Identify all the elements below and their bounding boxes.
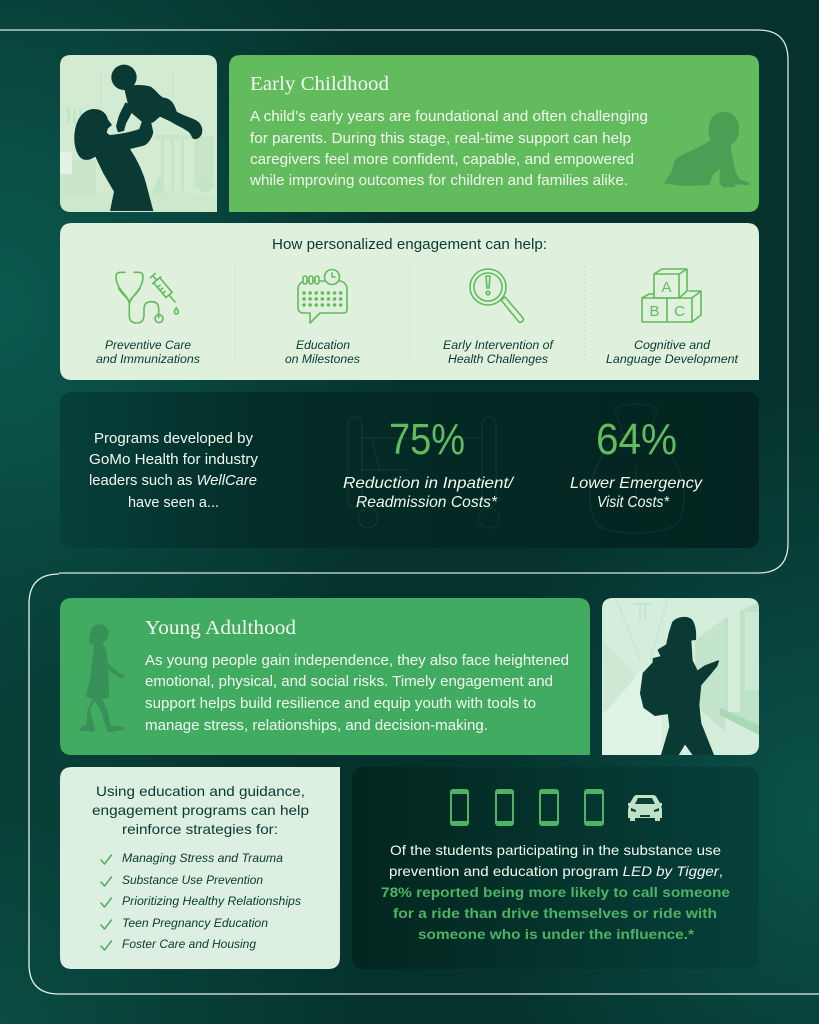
intro text: caregivers feel more confident, capable, and empowered — [250, 152, 634, 168]
stat: 75%: Readmission Costs* — [356, 494, 498, 511]
caption: cognitive and language: Cognitive and — [634, 338, 711, 352]
icon: car — [628, 795, 662, 821]
intro text: support helps build resilience and equip youth with tools to — [145, 696, 536, 712]
section outline: early childhood — [0, 30, 788, 573]
heading: using education and guidance: Using education and guidance, — [96, 783, 305, 799]
text: programs developed by: GoMo Health for industry — [89, 452, 259, 468]
caption: early intervention — [443, 338, 555, 366]
faint icon: money bag — [590, 404, 684, 533]
caption: cognitive and language — [606, 338, 739, 366]
panel: how personalized engagement can help — [60, 223, 759, 380]
checklist: Foster Care and Housing — [122, 937, 256, 951]
text: programs developed by: leaders such as WellCare — [89, 473, 257, 489]
panel: student in hallway photo — [602, 598, 759, 755]
checklist: Teen Pregnancy Education — [122, 916, 268, 930]
heading: using education and guidance: reinforce strategies for: — [122, 821, 278, 837]
icons: four phones — [450, 789, 604, 826]
intro text: manage stress, relationships, and decision-making. — [145, 718, 488, 734]
icon: magnifying glass with alert — [470, 269, 523, 322]
panel: program results — [60, 392, 759, 548]
caption: early intervention: Health Challenges — [448, 352, 548, 366]
text: 78% highlight — [381, 884, 730, 942]
intro text: while improving outcomes for children and families alike. — [249, 173, 628, 189]
silhouette: student with phone — [641, 618, 718, 755]
text: 78% highlight: someone who is under the influence.* — [418, 926, 695, 942]
heading: using education and guidance: engagement programs can help — [92, 802, 309, 818]
caption: education on milestones: on Milestones — [285, 352, 360, 366]
caption: cognitive and language: Language Development — [606, 352, 739, 366]
caption: preventive care: Preventive Care — [105, 338, 191, 352]
text: 78% highlight: for a ride than drive themselves or ride with — [393, 905, 717, 921]
heading: using education and guidance — [92, 783, 309, 837]
intro text: emotional, physical, and social risks. Timely engagement and — [145, 674, 553, 690]
caption: education on milestones — [285, 338, 360, 366]
panel: LED by Tigger results — [352, 767, 759, 969]
icon: calendar with clock — [298, 270, 347, 323]
stat: 64% — [570, 415, 703, 511]
stat: 75%: 75% — [389, 415, 465, 464]
icon: alphabet blocks: B — [649, 303, 660, 320]
nursery background scene — [60, 107, 214, 212]
icon: alphabet blocks: C — [674, 303, 685, 320]
intro text: A child’s early years are foundational and often challenging — [250, 109, 648, 125]
stat: 64%: Visit Costs* — [597, 494, 670, 511]
section outline: young adulthood — [29, 574, 819, 994]
checklist: Prioritizing Healthy Relationships — [122, 894, 301, 908]
stat: 75%: Reduction in Inpatient/ — [343, 475, 515, 492]
intro text: As young people gain independence, they also face heightened — [145, 653, 569, 669]
panel: young adulthood intro — [60, 598, 590, 755]
icon: alphabet blocks — [642, 269, 701, 322]
text: programs developed by: have seen a... — [128, 495, 219, 511]
faint icon: cart — [348, 417, 499, 528]
hallway background scene — [603, 598, 759, 755]
checklist: Substance Use Prevention — [122, 873, 263, 887]
caption: education on milestones: Education — [296, 338, 350, 352]
heading: Early Childhood: Early Childhood — [250, 73, 389, 95]
heading: Young Adulthood: Young Adulthood — [145, 617, 296, 639]
text: students participating: prevention and education program LED by Tigger , — [389, 863, 723, 879]
stat: 64%: 64% — [596, 415, 677, 464]
panel: early childhood intro — [229, 55, 759, 212]
stat: 64%: Lower Emergency — [570, 475, 703, 492]
icon: stethoscope and syringe — [116, 272, 179, 323]
caption: early intervention: Early Intervention of — [443, 338, 555, 352]
text: students participating — [389, 842, 723, 879]
intro text — [249, 109, 648, 189]
heading: how personalized engagement: How personalized engagement can help: — [272, 237, 547, 253]
text: 78% highlight: 78% reported being more likely to call someone — [381, 884, 730, 900]
icon: crawling baby — [664, 112, 750, 188]
caption: preventive care: and Immunizations — [96, 352, 200, 366]
panel: education and guidance strategies — [60, 767, 340, 969]
text: programs developed by: Programs developed by — [94, 431, 254, 447]
intro text — [145, 653, 569, 734]
icon: alphabet blocks: A — [661, 279, 672, 296]
caption: preventive care — [96, 338, 200, 366]
intro text: for parents. During this stage, real-time support can help — [250, 131, 631, 147]
icon: walking girl — [79, 624, 125, 732]
checklist: Managing Stress and Trauma — [122, 851, 283, 865]
text: students participating: Of the students participating in the substance use — [390, 842, 721, 858]
dotted separators — [235, 267, 585, 366]
text: programs developed by — [89, 431, 259, 511]
checklist — [101, 851, 301, 951]
panel: mother and baby photo — [60, 55, 217, 212]
silhouette: mother lifting baby — [74, 65, 202, 211]
stat: 75% — [343, 415, 515, 511]
